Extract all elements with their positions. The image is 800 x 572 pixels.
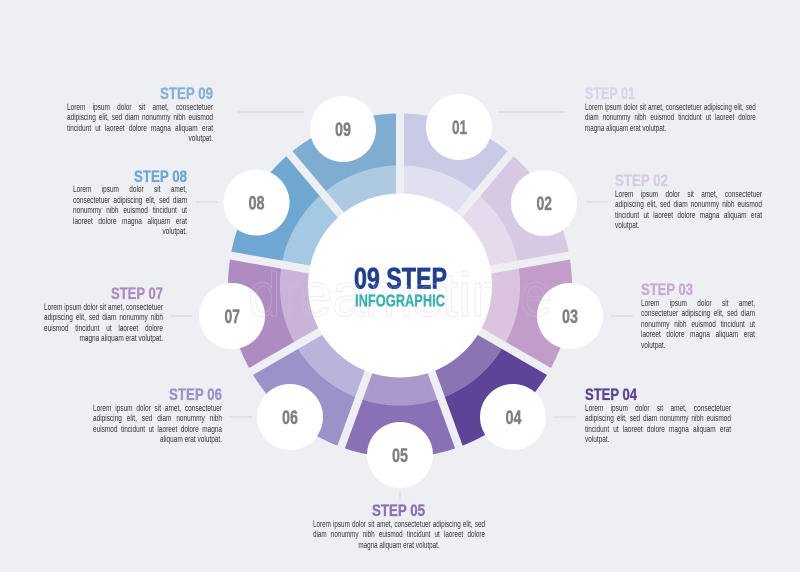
step 09 text: Lorem ipsum dolor sit amet, consectetuer: [67, 102, 213, 112]
step 09 text: [67, 84, 214, 145]
step 03 text: STEP 03: [641, 280, 693, 299]
node 02: 02: [536, 193, 552, 215]
step 04 text: adipiscing elit, sed diam nonummy nibh euismod: [585, 413, 731, 423]
center circle: [308, 194, 492, 378]
node 03: 03: [562, 306, 578, 328]
step 05 text: STEP 05: [372, 501, 425, 520]
step 06 text: STEP 06: [169, 385, 222, 404]
step 04 text: tincidunt ut laoreet dolore magna aliquam erat: [585, 424, 731, 434]
node 05: [367, 422, 433, 488]
step 09 text: volutpat.: [189, 133, 213, 143]
segment 08: [231, 154, 342, 270]
step 07 text: euismod tincidunt ut laoreet dolore: [44, 323, 163, 333]
step 08 text: STEP 08: [134, 167, 187, 186]
step 02 text: Lorem ipsum dolor sit amet, consectetuer: [615, 189, 762, 199]
step 06 text: aliquam erat volutpat.: [160, 434, 222, 444]
node 07: [199, 283, 265, 349]
step 04 text: volutpat.: [585, 434, 610, 444]
watermark: dreamstime: [248, 261, 552, 330]
node 07: 07: [224, 306, 240, 328]
segment 01: [400, 113, 511, 217]
step 09 text: tincidunt ut laoreet dolore magna aliquam erat: [67, 123, 213, 133]
segment 07: [228, 256, 322, 372]
segment 04: [431, 330, 549, 447]
step 06 text: adipiscing elit, sed diam nonummy nibh: [93, 413, 222, 423]
segment 02: [458, 154, 569, 270]
step 05 text: [313, 501, 486, 552]
step 01 text: magna aliquam erat volutpat.: [585, 123, 666, 133]
node 08: [224, 170, 290, 236]
step 01 text: [585, 84, 757, 135]
step 06 text: [93, 385, 223, 446]
step 02 text: [615, 171, 763, 232]
segment 09: [289, 113, 400, 217]
step 02 text: STEP 02: [615, 171, 668, 190]
center title: [354, 262, 447, 310]
step 07 text: Lorem ipsum dolor sit amet, consectetuer: [44, 302, 163, 312]
step 01 text: Lorem ipsum dolor sit amet, consectetuer adipiscing elit, sed: [585, 102, 756, 112]
node 06: [257, 384, 323, 450]
step 03 text: laoreet dolore magna aliquam erat: [641, 329, 755, 339]
step 08 text: nonummy nibh euismod tincidunt ut: [73, 205, 187, 215]
center title: 09 STEP: [354, 262, 447, 296]
step 03 text: [641, 280, 756, 352]
step 07 text: STEP 07: [111, 284, 163, 303]
step 03 text: volutpat.: [641, 340, 666, 350]
step 05 text: magna aliquam erat volutpat.: [358, 540, 440, 550]
node 06: 06: [282, 407, 298, 429]
step 09 text: STEP 09: [160, 84, 213, 103]
step 01 text: diam nonummy nibh euismod tincidunt ut laoreet dolore: [585, 112, 756, 122]
node 01: [426, 94, 492, 160]
node 02: [511, 170, 577, 236]
segment 06: [251, 330, 369, 447]
node 05: 05: [392, 445, 408, 467]
center title: INFOGRAPHIC: [355, 290, 445, 310]
step 01 text: STEP 01: [585, 84, 635, 103]
step 05 text: Lorem ipsum dolor sit amet, consectetuer adipiscing elit, sed: [313, 519, 485, 529]
step 07 text: adipiscing elit, sed diam nonummy nibh: [44, 312, 163, 322]
segment 03: [478, 256, 572, 372]
step 07 text: magna aliquam erat volutpat.: [79, 333, 163, 343]
step 02 text: adipiscing elit, sed diam nonummy nibh euismod: [615, 199, 762, 209]
node 04: [480, 384, 546, 450]
step 08 text: volutpat.: [162, 226, 187, 236]
node 09: 09: [335, 119, 351, 141]
step 06 text: Lorem ipsum dolor sit amet, consectetuer: [93, 403, 222, 413]
step 07 text: [44, 284, 164, 345]
step 04 text: STEP 04: [585, 385, 637, 404]
step 05 text: diam nonummy nibh euismod tincidunt ut laoreet dolore: [313, 529, 485, 539]
node 04: 04: [506, 407, 522, 429]
step 02 text: tincidunt ut laoreet dolore magna aliquam erat: [615, 210, 762, 220]
segment 05: [341, 370, 459, 457]
step 08 text: [73, 167, 188, 238]
step 08 text: Lorem ipsum dolor sit amet,: [73, 184, 187, 194]
ring diagram: [228, 113, 572, 457]
step 03 text: nonummy nibh euismod tincidunt ut: [641, 319, 755, 329]
step 03 text: Lorem ipsum dolor sit amet,: [641, 298, 755, 308]
step 04 text: Lorem ipsum dolor sit amet, consectetuer: [585, 403, 731, 413]
step 09 text: adipiscing elit, sed diam nonummy nibh euismod: [67, 112, 213, 122]
step 08 text: laoreet dolore magna aliquam erat: [73, 216, 187, 226]
step 06 text: euismod tincidunt ut laoreet dolore magna: [93, 424, 222, 434]
step 03 text: consectetuer adipiscing elit, sed diam: [641, 308, 755, 318]
step 04 text: [585, 385, 732, 446]
node 03: [537, 283, 603, 349]
step 08 text: consectetuer adipiscing elit, sed diam: [73, 195, 187, 205]
node 01: 01: [452, 117, 467, 139]
node 09: [310, 96, 376, 162]
node 08: 08: [248, 192, 265, 214]
step 02 text: volutpat.: [615, 220, 640, 230]
